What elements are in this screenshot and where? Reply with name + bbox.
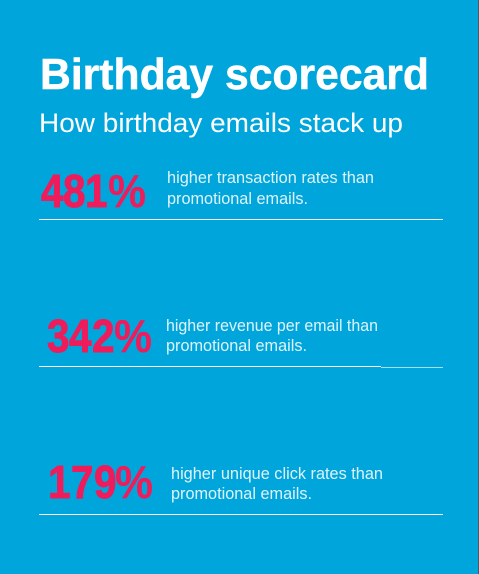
stat description: unique click rates xyxy=(171,464,383,503)
stat row: unique click rates xyxy=(39,456,443,515)
title: Birthday scorecard xyxy=(40,50,429,99)
stat row: revenue per email xyxy=(39,310,443,368)
stat row: transaction rates xyxy=(39,165,443,220)
stat number: 342% xyxy=(47,310,152,363)
stat number: 342%: % xyxy=(114,310,152,362)
stat number: 342%: 342 xyxy=(47,312,114,363)
stat number: 179%: % xyxy=(115,456,153,508)
stat number: 481%: 481 xyxy=(41,167,108,218)
stat number: 179%: 179 xyxy=(48,458,116,509)
stat description: unique click rates: higher unique click rates than xyxy=(171,464,383,483)
stat description: revenue per email xyxy=(166,316,378,355)
stat description: revenue per email: promotional emails. xyxy=(166,336,307,355)
stat description: transaction rates xyxy=(167,168,374,208)
stat description: transaction rates: higher transaction rates than xyxy=(167,168,374,187)
stat description: revenue per email: higher revenue per email than xyxy=(166,316,378,335)
stat number: 179% xyxy=(48,456,153,509)
stat number: 481% xyxy=(41,165,146,218)
stat number: 481%: % xyxy=(108,165,146,217)
stat description: unique click rates: promotional emails. xyxy=(171,484,312,503)
stat description: transaction rates: promotional emails. xyxy=(167,189,308,208)
subtitle: How birthday emails stack up xyxy=(39,108,403,138)
